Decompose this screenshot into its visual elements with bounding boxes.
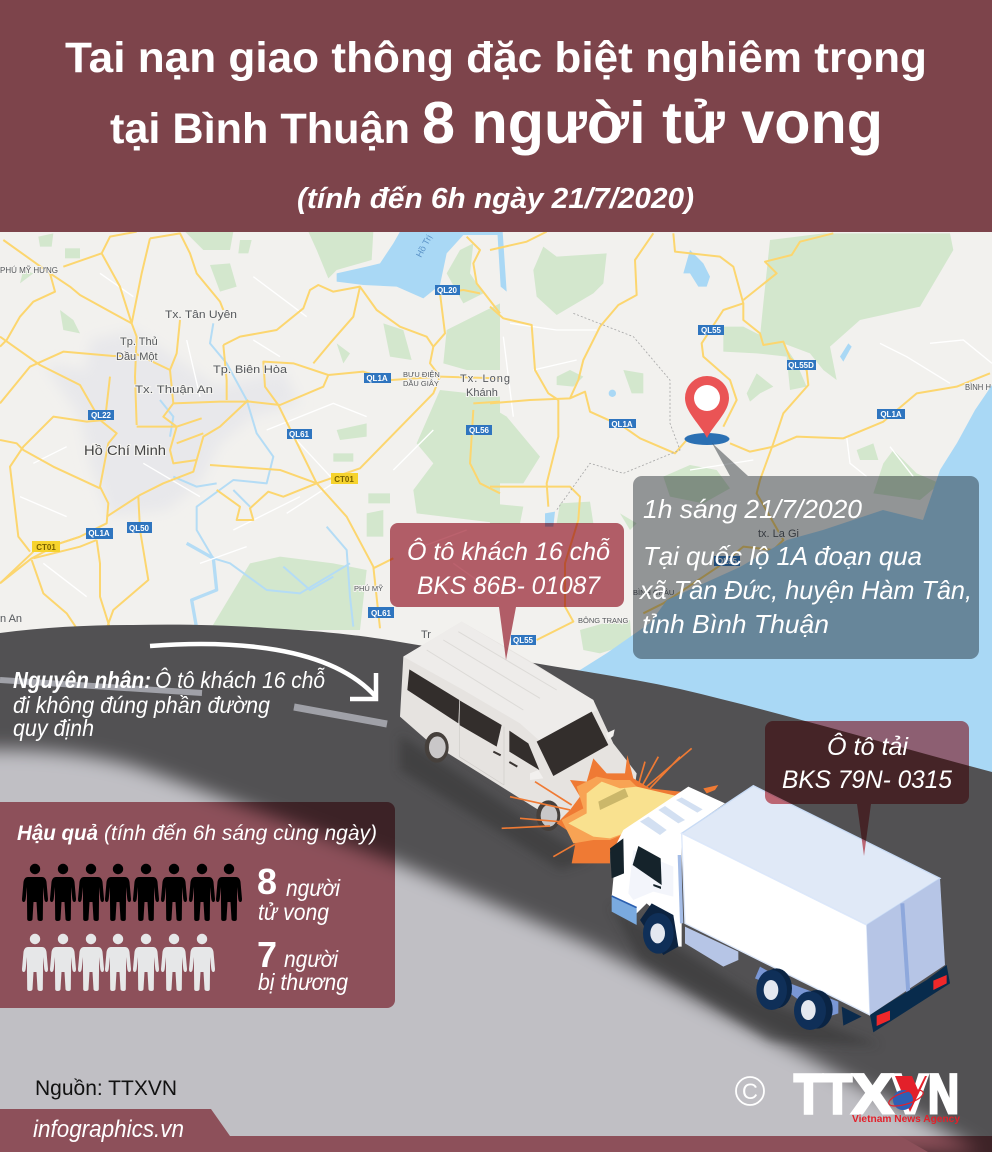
source: Nguồn: TTXVN xyxy=(35,1077,177,1100)
footer band xyxy=(0,1109,992,1152)
map labels: Tr xyxy=(421,629,431,641)
injured count: bị thương xyxy=(258,969,348,995)
logo TTXVN: T xyxy=(794,1062,823,1125)
highway shields: QL55D xyxy=(788,361,814,370)
callout: passenger van xyxy=(390,523,624,660)
map xyxy=(0,232,992,670)
highway shields: QL22 xyxy=(91,411,112,420)
callout: time and place: Tại quốc lộ 1A đoạn qua xyxy=(643,541,922,571)
van body xyxy=(400,622,637,840)
callout: passenger van: Ô tô khách 16 chỗ xyxy=(407,537,610,566)
map east part xyxy=(490,232,992,653)
subtitle: (tính đến 6h ngày 21/7/2020) xyxy=(297,183,694,215)
highway shields xyxy=(32,285,905,645)
map labels: Hồ Chí Minh xyxy=(84,442,166,458)
panel heading: Hậu quả xyxy=(17,822,98,845)
callout: time and place: tỉnh Bình Thuận xyxy=(642,609,829,639)
cause text: quy định xyxy=(13,715,94,741)
van wheels xyxy=(425,732,449,763)
cause text: Ô tô khách 16 chỗ xyxy=(155,666,325,693)
panel: consequences xyxy=(0,802,395,1008)
road xyxy=(0,625,992,1152)
truck wheels xyxy=(640,903,678,955)
roads east xyxy=(490,232,990,640)
cause text: Nguyên nhân: xyxy=(13,667,151,693)
rear fender xyxy=(755,967,838,1018)
highway shields: QL1A xyxy=(880,410,902,419)
logo TTXVN: N xyxy=(928,1062,959,1125)
highway shields: QL55 xyxy=(701,326,722,335)
map labels: BÌNH CHÂU xyxy=(633,588,674,597)
cargo box xyxy=(682,786,940,925)
lake Trị An xyxy=(337,232,500,298)
logo TTXVN: T xyxy=(823,1062,852,1125)
copyright symbol: C xyxy=(742,1079,758,1104)
cause text: đi không đúng phần đường xyxy=(13,692,270,718)
map labels: Tx. Long xyxy=(460,373,510,385)
map labels: PHÚ MỸ xyxy=(354,584,383,593)
injured count xyxy=(257,934,348,995)
callout: passenger van: BKS 86B- 01087 xyxy=(417,572,601,600)
highway shields: QL20 xyxy=(437,286,458,295)
callout: time and place: 1h sáng 21/7/2020 xyxy=(643,494,863,524)
truck bumper xyxy=(612,897,637,925)
highway shields: QL55 xyxy=(717,557,738,566)
map labels: BÔNG TRANG xyxy=(578,616,628,625)
map labels: PHÚ MỸ HƯNG xyxy=(0,266,58,275)
vehicle shadows xyxy=(400,735,880,1045)
road lane markings xyxy=(0,680,387,724)
grey ground xyxy=(0,750,980,1152)
sea xyxy=(530,385,992,800)
location pin xyxy=(684,376,730,445)
map labels: Dầu Một xyxy=(116,351,158,363)
callout: truck: BKS 79N- 0315 xyxy=(782,766,952,794)
title line 1: Tai nạn giao thông đặc biệt nghiêm trọng xyxy=(65,34,927,82)
map labels: Tx. Thuận An xyxy=(135,384,213,396)
roads west xyxy=(0,232,500,628)
callout: time and place xyxy=(633,443,979,659)
callout: time and place: xã Tân Đức, huyện Hàm Tân, xyxy=(638,575,972,605)
header band xyxy=(0,0,992,232)
map labels: Tp. Biên Hòa xyxy=(213,364,288,376)
highway shields: QL55 xyxy=(513,636,534,645)
icons: 7 injured xyxy=(22,934,215,991)
map labels: BƯU ĐIỆN xyxy=(403,370,440,379)
panel: consequences: (tính đến 6h sáng cùng ngày) xyxy=(104,822,377,845)
collision explosion xyxy=(502,748,713,863)
map labels: Tp. Thủ xyxy=(120,336,158,348)
map labels: n An xyxy=(0,613,22,625)
copyright symbol xyxy=(736,1077,764,1105)
map labels: BÌNH H xyxy=(965,383,991,392)
highway shields: QL50 xyxy=(129,524,150,533)
truck cab xyxy=(612,787,725,947)
logo TTXVN: V xyxy=(892,1062,928,1125)
highway shields: CT01 xyxy=(36,543,56,552)
dead count xyxy=(257,861,341,925)
highway shields: QL1A xyxy=(366,374,388,383)
mudflap xyxy=(842,1007,862,1026)
van xyxy=(400,622,637,840)
map labels: DẦU GIÂY xyxy=(403,378,439,388)
logo TTXVN xyxy=(794,1062,960,1125)
van windows xyxy=(407,669,608,776)
map labels: Hồ Trị xyxy=(414,233,434,259)
callout: truck: Ô tô tải xyxy=(827,732,909,761)
logo TTXVN: X xyxy=(852,1062,893,1125)
van roof xyxy=(403,622,597,741)
side skirt xyxy=(685,927,738,967)
highway shields: QL61 xyxy=(289,430,310,439)
highway shields: QL56 xyxy=(469,426,490,435)
callout: truck xyxy=(765,721,969,856)
truck windows xyxy=(633,846,662,885)
minor streets west xyxy=(20,273,500,597)
rear bumper xyxy=(870,965,950,1032)
map labels xyxy=(0,233,991,641)
highway shields: CT01 xyxy=(334,475,354,484)
map west part xyxy=(0,232,500,630)
cause text xyxy=(13,666,325,741)
arrow xyxy=(150,644,376,699)
title line 2: tại Bình Thuận xyxy=(110,105,410,153)
map labels: tx. La Gi xyxy=(758,528,799,540)
map labels: Tx. Tân Uyên xyxy=(165,309,237,321)
logo TTXVN: Vietnam News Agency xyxy=(852,1113,960,1125)
icons: 8 dead xyxy=(22,864,242,921)
footer band: infographics.vn xyxy=(33,1116,184,1143)
highway shields: QL1A xyxy=(88,529,110,538)
impact sparks xyxy=(502,748,692,857)
truck xyxy=(610,785,950,1032)
dead count: 8 xyxy=(257,861,277,902)
dead count: tử vong xyxy=(258,899,329,925)
injured count: 7 xyxy=(257,934,277,975)
highway shields: QL61 xyxy=(371,609,392,618)
highway shields: QL1A xyxy=(611,420,633,429)
injured count: người xyxy=(284,946,339,972)
map labels: Khánh xyxy=(466,387,498,399)
dead count: người xyxy=(286,875,341,901)
title highlight: 8 người tử vong xyxy=(422,90,883,156)
